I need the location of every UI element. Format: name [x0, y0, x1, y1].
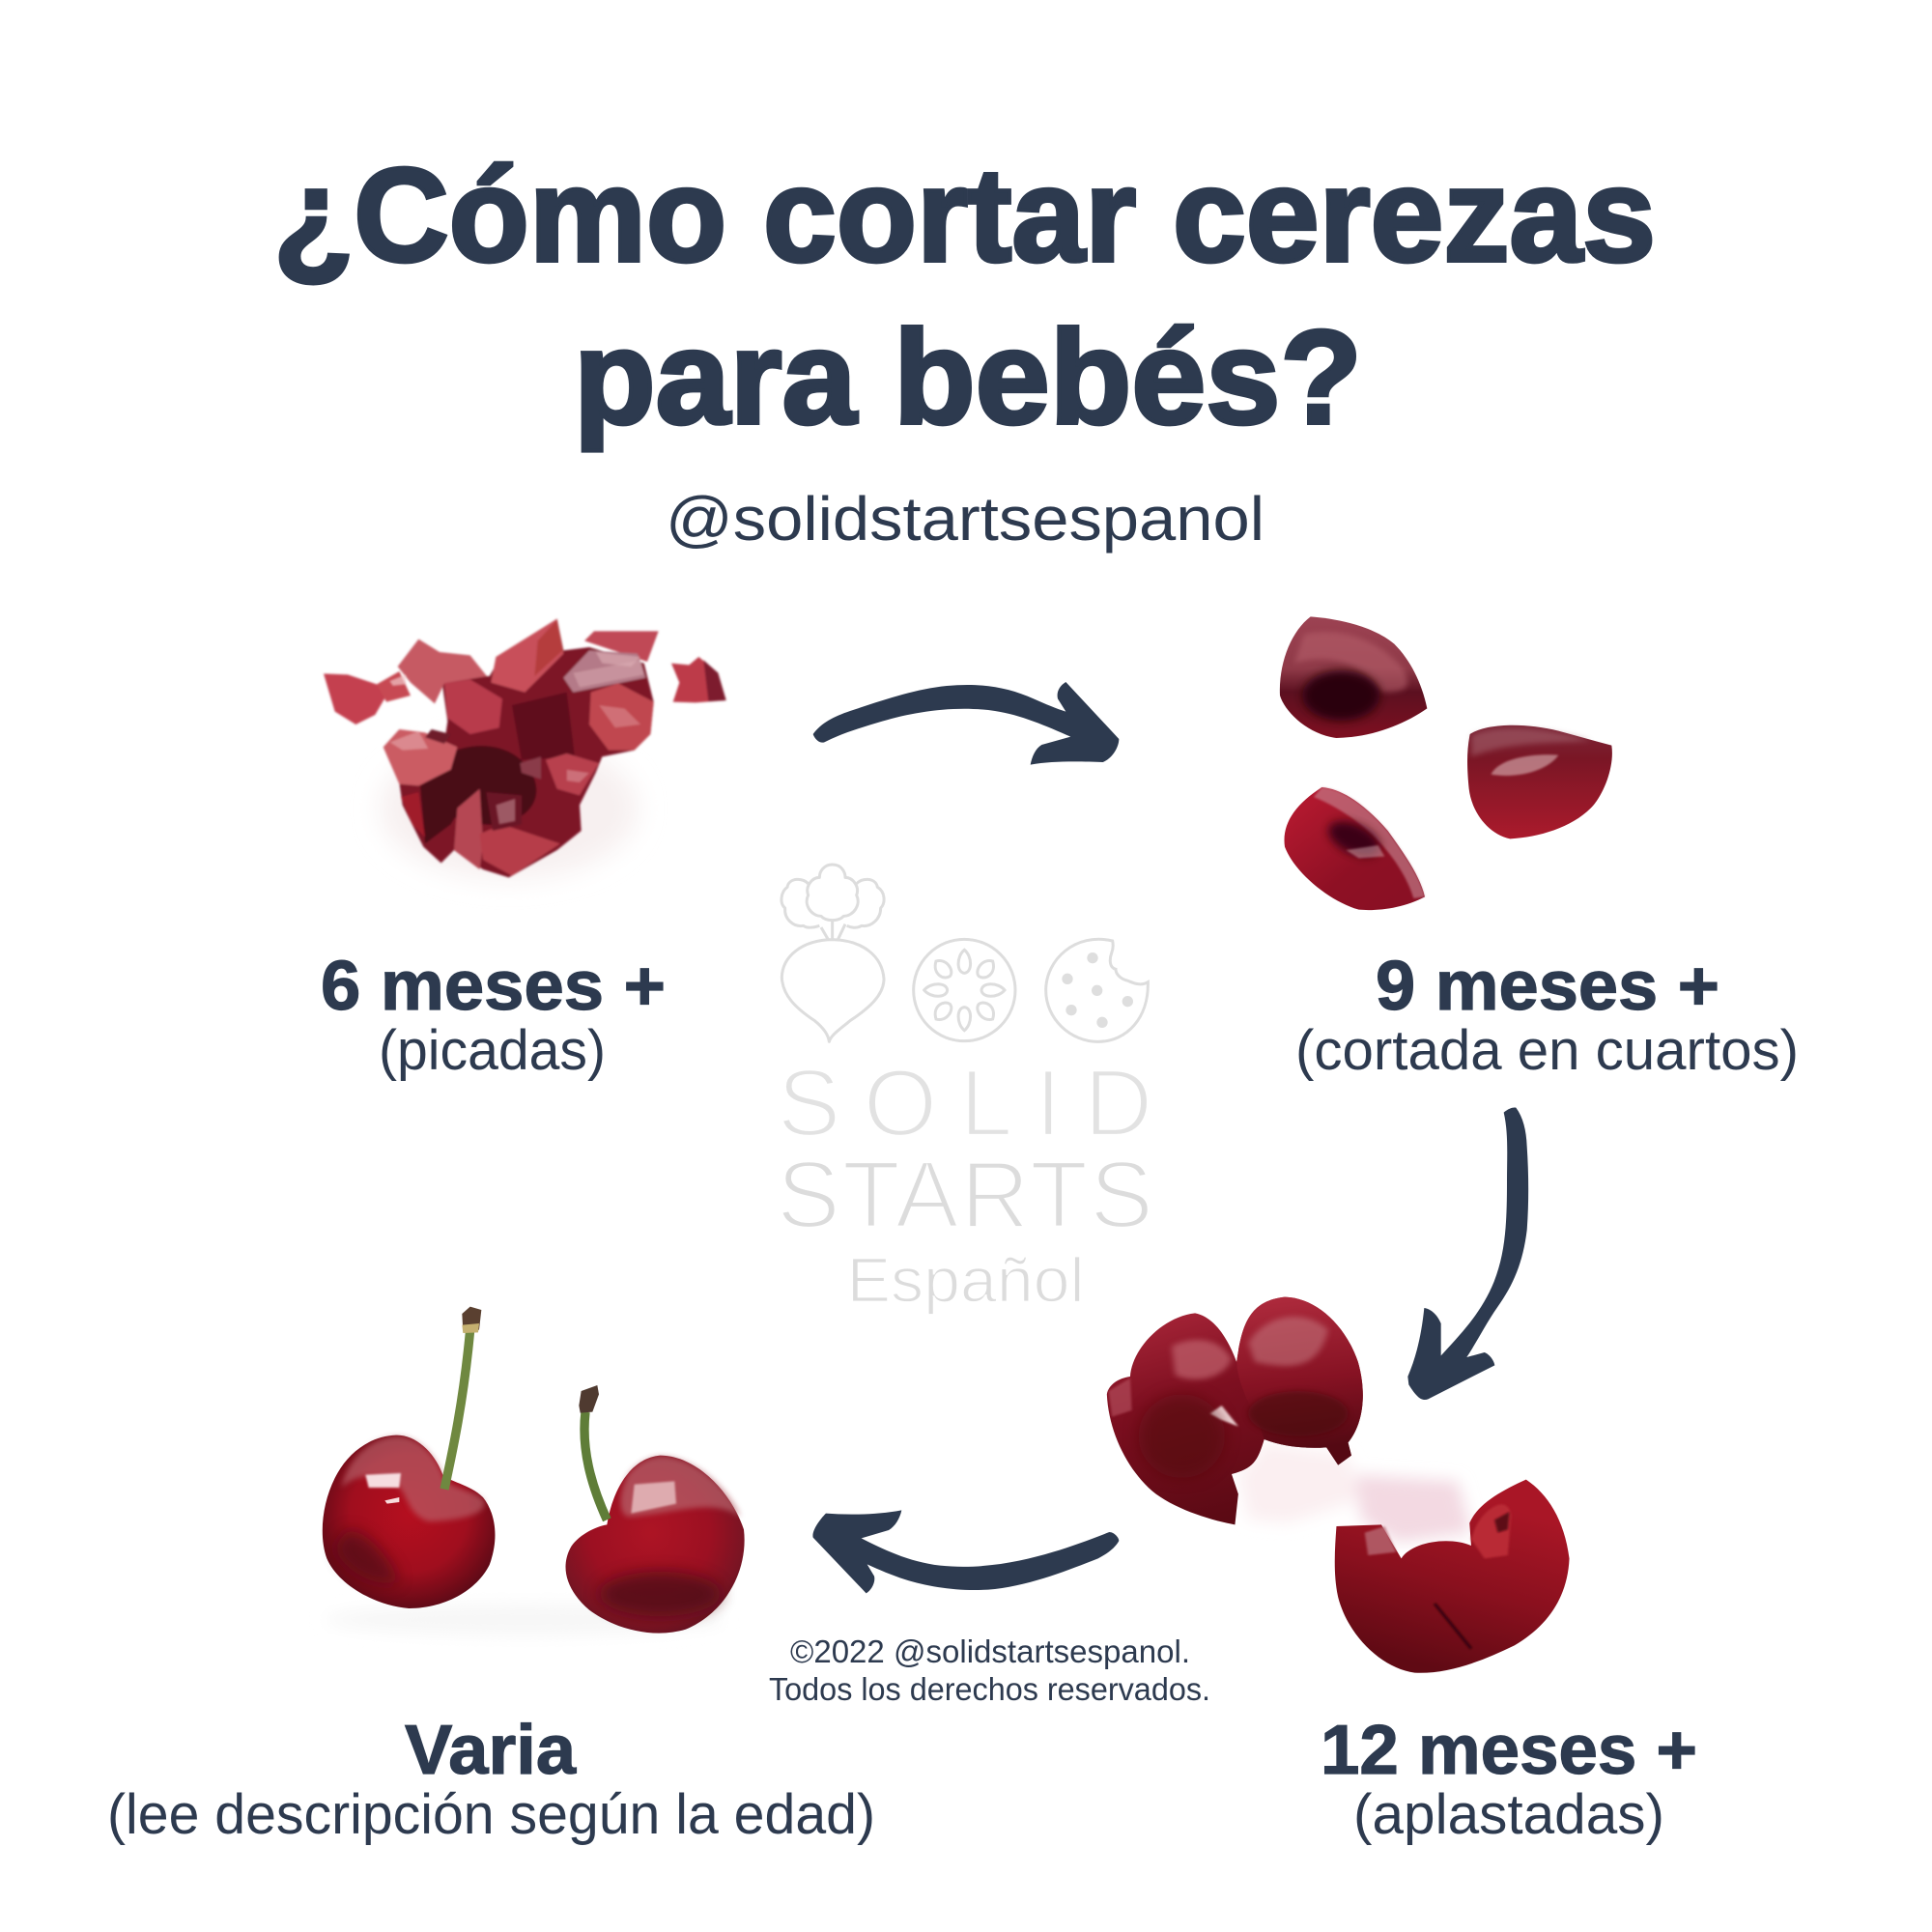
icon: cookie	[1046, 939, 1148, 1041]
label: twelve months: (aplastadas)	[1353, 1783, 1664, 1846]
logo wordmark: SOLID	[778, 1050, 1152, 1156]
right stem	[579, 1385, 607, 1520]
photo: chopped cherries	[324, 619, 726, 879]
food shadow	[380, 737, 638, 879]
label: six months: (picadas)	[379, 1019, 606, 1082]
right cherry	[565, 1456, 745, 1634]
title: para bebés?	[574, 303, 1362, 452]
label: six months	[321, 948, 666, 1082]
label: varia: (lee descripción según la edad)	[107, 1783, 875, 1846]
title	[273, 141, 1656, 452]
icon: beet	[781, 865, 884, 1041]
logo wordmark: Español	[847, 1245, 1085, 1316]
label: varia	[107, 1712, 875, 1846]
copyright	[769, 1634, 1210, 1707]
logo wordmark	[777, 1050, 1153, 1316]
quarter two	[1467, 725, 1612, 838]
juice stain	[1238, 1442, 1471, 1543]
label: six months: 6 meses +	[321, 948, 666, 1025]
chopped pieces	[324, 619, 726, 877]
lower smashed half	[1335, 1480, 1570, 1673]
cherry shadow	[326, 1604, 724, 1635]
photo: smashed cherries	[1107, 1297, 1570, 1673]
arrow: six months to nine months	[813, 682, 1119, 765]
logo wordmark: STARTS	[777, 1142, 1153, 1248]
label: nine months: 9 meses +	[1376, 948, 1719, 1025]
arrow: twelve months to varia	[812, 1510, 1119, 1593]
icon: cucumber slice	[914, 939, 1015, 1041]
quarter one	[1280, 616, 1427, 738]
highlights	[389, 652, 644, 824]
upper smashed halves	[1107, 1297, 1363, 1524]
copyright: Todos los derechos reservados.	[769, 1671, 1210, 1707]
label: nine months	[1295, 948, 1799, 1082]
left stem	[444, 1307, 481, 1490]
watermark logo	[777, 865, 1153, 1316]
label: nine months: (cortada en cuartos)	[1295, 1019, 1799, 1082]
photo: quartered cherries	[1280, 616, 1612, 910]
label: twelve months	[1321, 1712, 1697, 1846]
copyright: ©2022 @solidstartsespanol.	[790, 1634, 1190, 1669]
photo: whole cherries	[323, 1307, 745, 1635]
arrow: nine months to twelve months	[1407, 1108, 1528, 1400]
label: varia: Varia	[405, 1712, 577, 1789]
label: twelve months: 12 meses +	[1321, 1712, 1697, 1789]
title: ¿Cómo cortar cerezas	[273, 141, 1656, 290]
left cherry	[323, 1435, 495, 1608]
quarter three	[1284, 787, 1425, 910]
handle: @solidstartsespanol	[666, 484, 1264, 554]
